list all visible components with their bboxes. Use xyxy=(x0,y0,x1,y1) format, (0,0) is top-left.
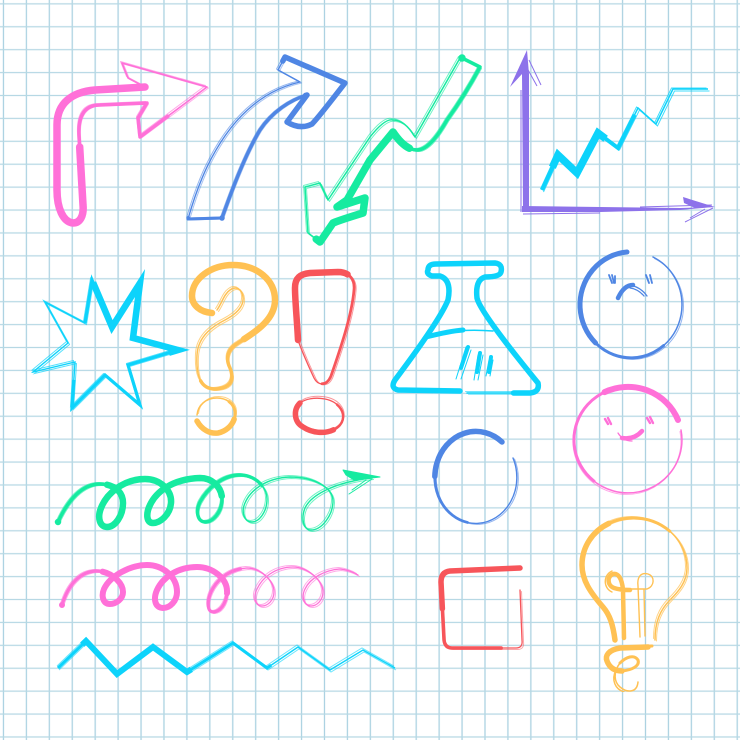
eyes xyxy=(609,275,652,283)
liquid level xyxy=(426,330,463,337)
question curve xyxy=(190,264,276,390)
icon: orange light bulb xyxy=(580,516,688,692)
face outline xyxy=(580,252,684,359)
bulb base xyxy=(606,646,652,692)
icon: blue sad face xyxy=(580,252,684,359)
face outline xyxy=(573,387,682,494)
loops xyxy=(56,474,374,532)
eyes xyxy=(605,417,653,424)
icon: orange question mark xyxy=(190,264,276,433)
trend line xyxy=(540,88,710,192)
icon: cyan burst star xyxy=(32,278,180,410)
icon: pink bent arrow xyxy=(56,62,208,224)
icon: green zigzag down arrow xyxy=(304,56,482,244)
smile xyxy=(622,431,642,438)
exclamation body xyxy=(295,272,356,385)
filament xyxy=(605,571,653,638)
chart: purple axes with cyan trend line xyxy=(510,50,715,222)
icon: green loop arrow xyxy=(56,470,380,532)
liquid marks xyxy=(461,347,491,372)
question dot xyxy=(197,396,237,433)
icon: red exclamation mark xyxy=(295,272,356,432)
x axis arrow xyxy=(522,197,715,222)
icon: blue curved arrow xyxy=(186,56,346,220)
icon: cyan flask xyxy=(392,262,540,394)
icon: cyan zigzag line xyxy=(57,639,396,676)
icon: pink loop line xyxy=(60,564,360,614)
icon: pink smiley face xyxy=(573,387,682,494)
exclamation dot xyxy=(295,396,344,432)
bulb glass xyxy=(580,516,688,641)
icon: red square xyxy=(441,568,524,650)
flask outline xyxy=(392,262,540,394)
icon: blue circle xyxy=(435,431,518,524)
arrow head xyxy=(343,470,380,494)
y axis arrow xyxy=(510,50,541,212)
frown xyxy=(618,285,633,298)
